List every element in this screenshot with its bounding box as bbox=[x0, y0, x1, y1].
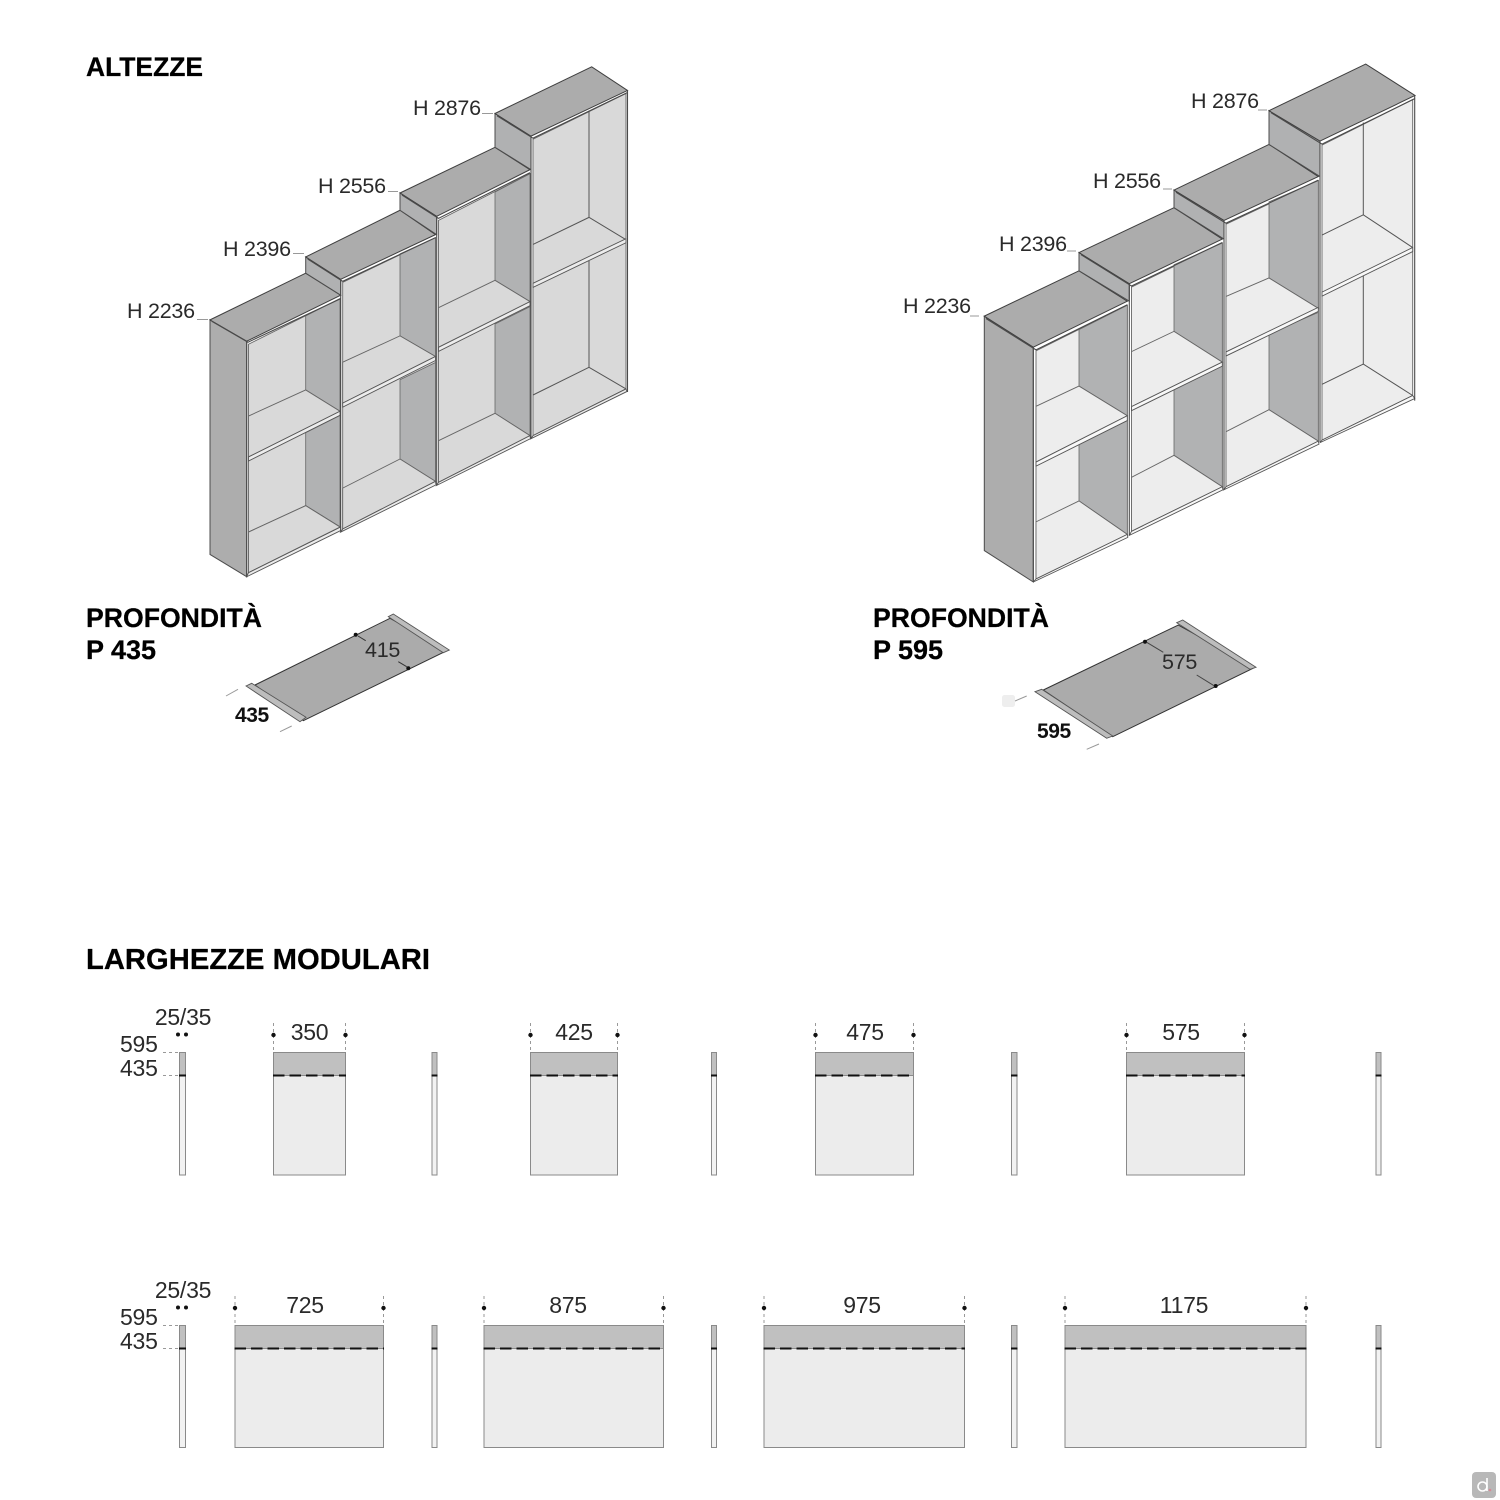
side panel bbox=[432, 1326, 438, 1448]
module H 2396 deep bbox=[1079, 208, 1223, 535]
height labels, depth 435: H 2236 bbox=[127, 299, 195, 323]
module H 2396 bbox=[306, 210, 436, 532]
module H 2556 bbox=[400, 147, 530, 485]
heading: profondità P 435: P 435 bbox=[86, 635, 156, 665]
height labels, depth 595 bbox=[903, 89, 1267, 318]
module width 475: 475 bbox=[846, 1019, 884, 1045]
side profile with depth dimensions: 595 bbox=[120, 1304, 158, 1330]
height labels, depth 435: H 2556 bbox=[318, 174, 386, 198]
module width 725 bbox=[233, 1292, 386, 1448]
shelf plan P 435: 435 bbox=[235, 704, 270, 727]
heading: altezze: ALTEZZE bbox=[86, 52, 203, 82]
module H 2236 bbox=[210, 273, 341, 577]
height labels, depth 595: H 2396 bbox=[999, 232, 1067, 256]
side profile with depth dimensions: 595 bbox=[120, 1031, 158, 1057]
shelf plan P 435 bbox=[226, 614, 449, 732]
module width 350 bbox=[271, 1019, 348, 1175]
side panel bbox=[1376, 1326, 1382, 1448]
module width 1175: 1175 bbox=[1160, 1292, 1208, 1318]
side panel bbox=[711, 1326, 717, 1448]
heading: profondità P 595: P 595 bbox=[873, 635, 943, 665]
side profile with depth dimensions: 25/35 bbox=[155, 1004, 211, 1030]
heading: profondità P 595 bbox=[873, 602, 1049, 665]
side profile with depth dimensions: 435 bbox=[120, 1328, 158, 1354]
widths row 1 bbox=[120, 1004, 1382, 1175]
module width 575 bbox=[1124, 1019, 1247, 1175]
module width 350: 350 bbox=[291, 1019, 328, 1045]
side profile with depth dimensions bbox=[120, 1004, 211, 1175]
module width 975: 975 bbox=[843, 1292, 881, 1318]
shelf plan P 595: 575 bbox=[1162, 650, 1197, 674]
shelf plan P 595: 595 bbox=[1037, 720, 1072, 743]
side panel bbox=[432, 1052, 438, 1175]
shelf plan P 435: 415 bbox=[365, 638, 400, 662]
heading: profondità P 595: PROFONDITÀ bbox=[873, 602, 1049, 633]
height labels, depth 595: H 2236 bbox=[903, 294, 971, 318]
height labels, depth 435 bbox=[127, 96, 493, 323]
module width 875 bbox=[482, 1292, 666, 1448]
module H 2236 deep bbox=[984, 271, 1128, 582]
module H 2876 deep bbox=[1269, 64, 1415, 443]
bookcase isometric, depth 595 bbox=[984, 64, 1415, 582]
side profile with depth dimensions: 25/35 bbox=[155, 1277, 211, 1303]
height labels, depth 595: H 2556 bbox=[1093, 169, 1161, 193]
side profile with depth dimensions bbox=[120, 1277, 211, 1448]
widths row 2 bbox=[120, 1277, 1382, 1448]
height labels, depth 435: H 2396 bbox=[223, 237, 291, 261]
module width 725: 725 bbox=[286, 1292, 324, 1318]
height labels, depth 435: H 2876 bbox=[413, 96, 481, 120]
height labels, depth 595: H 2876 bbox=[1191, 89, 1259, 113]
heading: profondità P 435: PROFONDITÀ bbox=[86, 602, 262, 633]
side panel bbox=[1011, 1052, 1018, 1175]
module width 475 bbox=[813, 1019, 916, 1175]
module width 425 bbox=[528, 1019, 620, 1175]
shelf plan P 595 bbox=[1002, 620, 1256, 749]
bookcase isometric, depth 435 bbox=[210, 67, 628, 577]
side panel bbox=[1011, 1326, 1018, 1448]
heading: larghezze modulari: LARGHEZZE MODULARI bbox=[86, 944, 430, 976]
icon: watermark logo bbox=[1472, 1472, 1496, 1498]
module H 2876 bbox=[495, 67, 628, 439]
module H 2556 deep bbox=[1174, 144, 1319, 490]
side panel bbox=[1376, 1052, 1382, 1175]
module width 975 bbox=[762, 1292, 967, 1448]
module width 875: 875 bbox=[549, 1292, 587, 1318]
heading: profondità P 435 bbox=[86, 602, 262, 665]
side panel bbox=[711, 1052, 717, 1175]
module width 575: 575 bbox=[1162, 1019, 1200, 1045]
module width 1175 bbox=[1063, 1292, 1308, 1448]
module width 425: 425 bbox=[555, 1019, 593, 1045]
side profile with depth dimensions: 435 bbox=[120, 1055, 158, 1081]
